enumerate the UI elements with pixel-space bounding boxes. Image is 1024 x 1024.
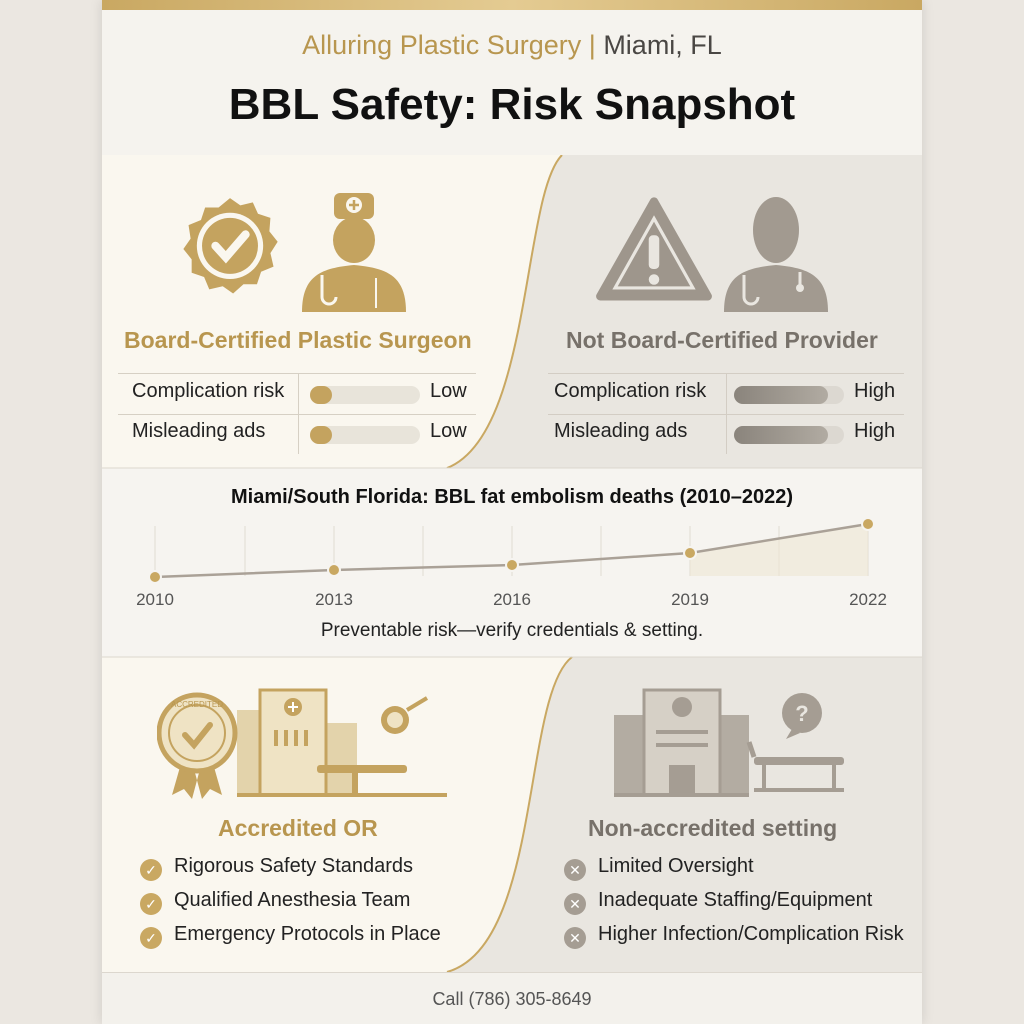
checklist: Rigorous Safety Standards bbox=[174, 855, 413, 877]
brand line: Alluring Plastic Surgery | Miami, FL bbox=[302, 30, 722, 60]
icon: surgeon bbox=[302, 193, 406, 312]
line chart: 2019 bbox=[671, 590, 709, 609]
gold top bar bbox=[102, 0, 922, 10]
phone: Call (786) 305-8649 bbox=[432, 989, 592, 1009]
line chart bbox=[136, 519, 887, 609]
list: ✕ bbox=[569, 930, 581, 946]
icon: warning bbox=[596, 197, 712, 300]
table: High bbox=[854, 420, 895, 442]
heading: Board-Certified Plastic Surgeon bbox=[124, 327, 472, 353]
caption: Preventable risk—verify credentials & setting. bbox=[321, 620, 703, 641]
panel: board-certified bbox=[118, 193, 476, 454]
table: Low bbox=[430, 420, 467, 442]
icon: certified badge bbox=[184, 198, 278, 294]
panel: not board-certified bbox=[548, 197, 904, 454]
table: Misleading ads bbox=[132, 420, 265, 442]
line chart: 2016 bbox=[493, 590, 531, 609]
line chart: 2010 bbox=[136, 590, 174, 609]
title: BBL Safety: Risk Snapshot bbox=[229, 80, 795, 129]
table: High bbox=[854, 380, 895, 402]
list: Inadequate Staffing/Equipment bbox=[598, 889, 872, 911]
list: ✕ bbox=[569, 862, 581, 878]
checklist: ✓ bbox=[145, 862, 157, 878]
header bbox=[229, 30, 795, 129]
table: Complication risk bbox=[554, 380, 706, 402]
heading: Non-accredited setting bbox=[588, 815, 837, 841]
heading: Accredited OR bbox=[218, 815, 378, 841]
table bbox=[118, 373, 476, 453]
panel: non-accredited bbox=[564, 688, 904, 949]
footer bbox=[102, 972, 922, 1024]
section backgrounds bbox=[102, 155, 922, 972]
icon: provider bbox=[724, 197, 828, 312]
icon: accredited facility bbox=[157, 688, 447, 799]
table: Complication risk bbox=[132, 380, 284, 402]
chart title: Miami/South Florida: BBL fat embolism deaths (2010–2022) bbox=[231, 486, 793, 508]
line chart: 2022 bbox=[849, 590, 887, 609]
icon: non-accredited facility bbox=[614, 688, 844, 797]
icon: non-accredited facility: ? bbox=[795, 701, 809, 726]
checklist: Emergency Protocols in Place bbox=[174, 923, 441, 945]
list: ✕ bbox=[569, 896, 581, 912]
table bbox=[548, 373, 904, 453]
table: Misleading ads bbox=[554, 420, 687, 442]
heading: Not Board-Certified Provider bbox=[566, 327, 878, 353]
checklist bbox=[140, 855, 441, 949]
list: Limited Oversight bbox=[598, 855, 754, 877]
panel: accredited OR bbox=[140, 688, 447, 949]
list: Higher Infection/Complication Risk bbox=[598, 923, 904, 945]
checklist: Qualified Anesthesia Team bbox=[174, 889, 410, 911]
icon: accredited facility: ACCREDITED bbox=[171, 700, 223, 709]
checklist: ✓ bbox=[145, 930, 157, 946]
checklist: ✓ bbox=[145, 896, 157, 912]
table: Low bbox=[430, 380, 467, 402]
chart: deaths trend bbox=[136, 486, 887, 641]
line chart: 2013 bbox=[315, 590, 353, 609]
list bbox=[564, 855, 904, 949]
